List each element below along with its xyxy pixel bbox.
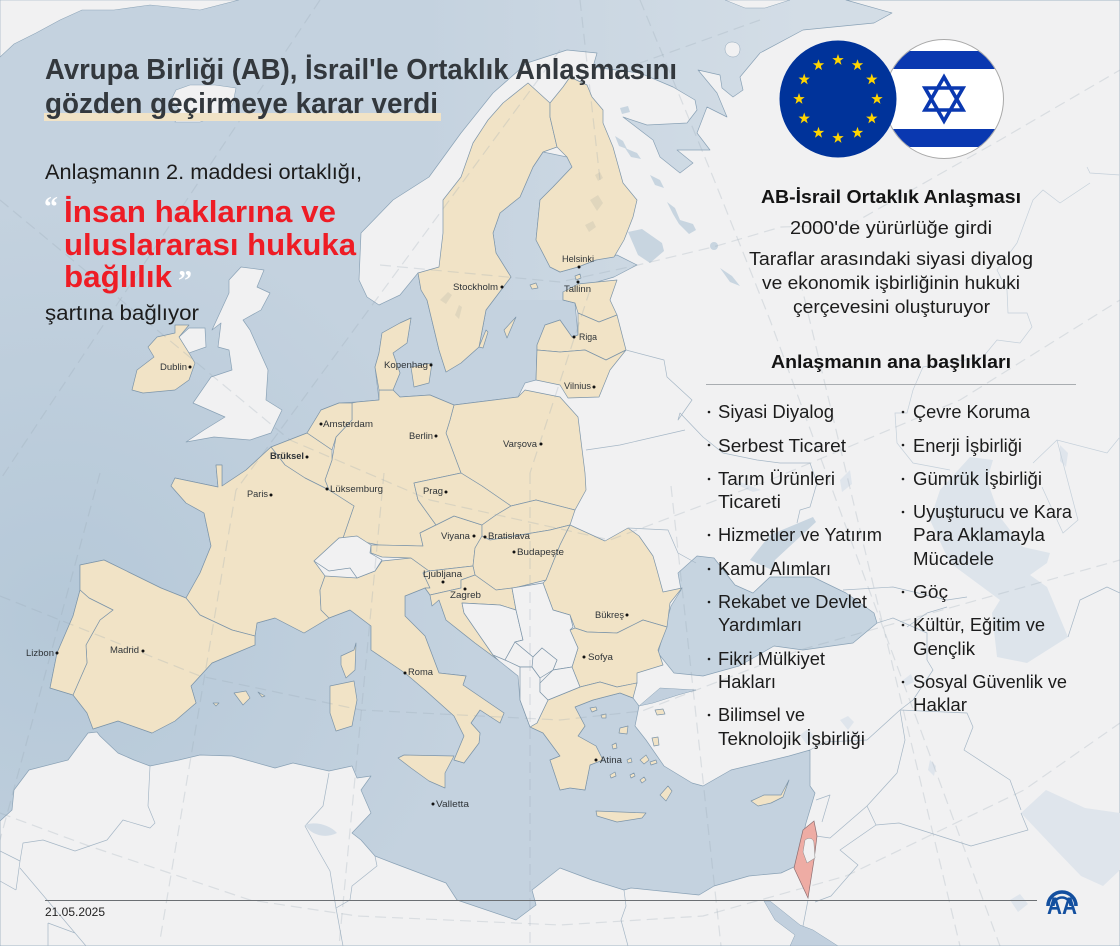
country: Bulgaria [570, 620, 667, 687]
country: Romania [543, 525, 682, 633]
country: Poland [446, 390, 586, 510]
country: Corsica [341, 643, 356, 678]
city labels: Atina [600, 755, 623, 766]
topics list: right column: Kültür, Eğitim ve [913, 615, 1045, 635]
country: Greece [530, 682, 637, 790]
city labels: Vilnius [564, 381, 591, 392]
city labels: Tallinn [564, 284, 591, 295]
topics list: right column: Enerji İşbirliği [913, 436, 1022, 456]
quote block [44, 161, 362, 325]
icon: AA logo: AA [1047, 893, 1077, 920]
city labels: Riga [579, 332, 598, 343]
quote block: Anlaşmanın 2. maddesi ortaklığı, [45, 161, 362, 184]
topics list: left column: Teknolojik İşbirliği [718, 729, 865, 749]
country: Danish islands [411, 363, 432, 387]
country: Sardinia [330, 681, 357, 731]
title: Avrupa Birliği (AB), İsrail'le Ortaklık Anlaşmasını [45, 54, 677, 86]
topics list: left column: Siyasi Diyalog [718, 402, 834, 422]
land: Arctic islands [725, 0, 790, 57]
agreement info text [749, 187, 1033, 317]
border lines of non-EU regions [0, 350, 1120, 946]
country: Belgium and Luxembourg [271, 433, 332, 490]
quote block: “ [44, 192, 58, 223]
sea: Black Sea [658, 556, 877, 676]
city labels: Berlin [409, 431, 433, 442]
city labels: Amsterdam [323, 419, 373, 430]
city labels: Sofya [588, 652, 614, 663]
city labels: Bükreş [595, 610, 624, 621]
topics list: right column [902, 402, 1073, 715]
sea: Red Sea gulfs [764, 901, 838, 946]
topics list: left column [708, 402, 882, 749]
lakes: Ladoga, Onega, Karelia [615, 106, 740, 286]
country: Estonia [563, 280, 617, 322]
topics list: left column: Rekabet ve Devlet [718, 592, 867, 612]
country: Lithuania [536, 350, 626, 398]
West Bank [803, 838, 815, 863]
quote block: İnsan haklarına ve [64, 194, 336, 229]
country: Montenegro and Kosovo [505, 642, 557, 678]
topics list: right column: Haklar [913, 695, 967, 715]
quote block: ” [178, 266, 192, 297]
topics list: left column: Hizmetler ve Yatırım [718, 525, 882, 545]
topics list: left column: Yardımları [718, 615, 802, 635]
topics list: left column: Hakları [718, 672, 776, 692]
land: Iceland [171, 85, 236, 122]
country: Serbia [512, 583, 578, 670]
faint Russia-Kazakhstan border lines [895, 167, 1120, 533]
country: Ireland [132, 325, 195, 393]
country: Germany [325, 390, 461, 546]
quote block: şartına bağlıyor [45, 302, 199, 325]
topics list: right column: Çevre Koruma [913, 402, 1031, 422]
country: Israel highlighted [794, 821, 817, 898]
topics list: right column: Sosyal Güvenlik ve [913, 672, 1067, 692]
city labels: Varşova [503, 439, 538, 450]
country: Sweden [418, 83, 557, 372]
country: Latvia [537, 313, 626, 360]
topics list: right column: Gümrük İşbirliği [913, 469, 1042, 489]
land: Northern Ireland [179, 328, 206, 353]
country: Portugal [50, 590, 113, 695]
city labels: Helsinki [562, 254, 594, 265]
city labels: Lizbon [26, 648, 54, 659]
sea: Persian Gulf [1021, 790, 1120, 886]
country: North Macedonia [540, 667, 580, 700]
country: Albania [520, 667, 548, 727]
title highlight bar [44, 113, 441, 121]
agreement info text: AB-İsrail Ortaklık Anlaşması [761, 187, 1021, 207]
topics list: left column: Tarım Ürünleri [718, 469, 835, 489]
topics list: right column: Para Aklamayla [913, 525, 1046, 545]
country: France [171, 447, 354, 636]
topics list: left column: Fikri Mülkiyet [718, 649, 825, 669]
country: Italy [320, 558, 504, 763]
sea: Azov [750, 517, 816, 570]
city labels: Budapeşte [517, 547, 564, 558]
country: Slovenia [423, 566, 475, 595]
city labels: Kopenhag [384, 360, 428, 371]
city labels: Lüksemburg [330, 484, 383, 495]
sea: Marmara [639, 688, 696, 706]
city labels: Bratislava [488, 531, 531, 542]
quote block: bağlılık [64, 259, 173, 294]
city dots [56, 266, 628, 806]
country: Switzerland [314, 536, 382, 578]
land: United Kingdom [186, 267, 282, 442]
agreement info text: Taraflar arasındaki siyasi diyalog [749, 249, 1033, 269]
topics list: right column: Uyuşturucu ve Kara [913, 502, 1073, 522]
sea: Caspian [930, 457, 1068, 663]
country: Netherlands [307, 403, 352, 450]
lake patches on Sweden and Finland [440, 172, 603, 319]
country: Hungary [473, 525, 570, 590]
country: Crete [596, 811, 646, 822]
EU countries [50, 77, 789, 822]
country: Austria [371, 516, 482, 571]
country: Czechia [414, 473, 511, 525]
title [44, 54, 677, 121]
city labels: Prag [423, 486, 443, 497]
city labels: Madrid [110, 645, 139, 656]
quote block: uluslararası hukuka [64, 227, 357, 262]
country: Spain [73, 560, 255, 733]
topics list: right column: Mücadele [913, 549, 994, 569]
country: Croatia [430, 575, 516, 660]
date: 21.05.2025 [45, 905, 105, 919]
flag: European Union [780, 40, 896, 158]
country: Gotland and islands [479, 274, 672, 801]
title: gözden geçirmeye karar verdi [45, 88, 438, 120]
country: Bosnia [462, 603, 523, 660]
country: Cyprus [751, 780, 789, 806]
Balkan non-EU countries [462, 583, 580, 727]
city labels: Viyana [441, 531, 471, 542]
lakes and eastern seas [735, 445, 1068, 912]
city labels: Valletta [436, 799, 470, 810]
city labels [26, 254, 628, 810]
city labels: Roma [408, 667, 434, 678]
flag: Israel [890, 39, 1004, 159]
light sea patches on land [305, 823, 337, 836]
agreement info text: 2000'de yürürlüğe girdi [790, 218, 992, 238]
city labels: Ljubljana [423, 569, 463, 580]
topics list: left column: Ticareti [718, 492, 781, 512]
city labels: Dublin [160, 362, 187, 373]
city labels: Zagreb [450, 590, 481, 601]
topics list: left column: Bilimsel ve [718, 705, 805, 725]
footer rule [45, 900, 1037, 901]
topics list: right column: Gençlik [913, 639, 976, 659]
city labels: Brüksel [270, 451, 304, 462]
main topics heading: Anlaşmanın ana başlıkları [771, 352, 1011, 372]
country: Balearic islands [213, 691, 265, 706]
topics list: left column: Kamu Alımları [718, 559, 831, 579]
city labels: Paris [247, 489, 268, 500]
agreement info text: ve ekonomik işbirliğinin hukuki [762, 273, 1020, 293]
agreement info text: çerçevesini oluşturuyor [793, 297, 990, 317]
country: Finland [536, 77, 637, 272]
land: Greenland [0, 0, 239, 57]
city labels: Stockholm [453, 282, 498, 293]
topics list: right column: Göç [913, 582, 948, 602]
country: Sicily [398, 755, 454, 788]
country: Denmark [375, 318, 411, 390]
topics list: left column: Serbest Ticaret [718, 436, 846, 456]
country: Slovakia [482, 500, 575, 540]
